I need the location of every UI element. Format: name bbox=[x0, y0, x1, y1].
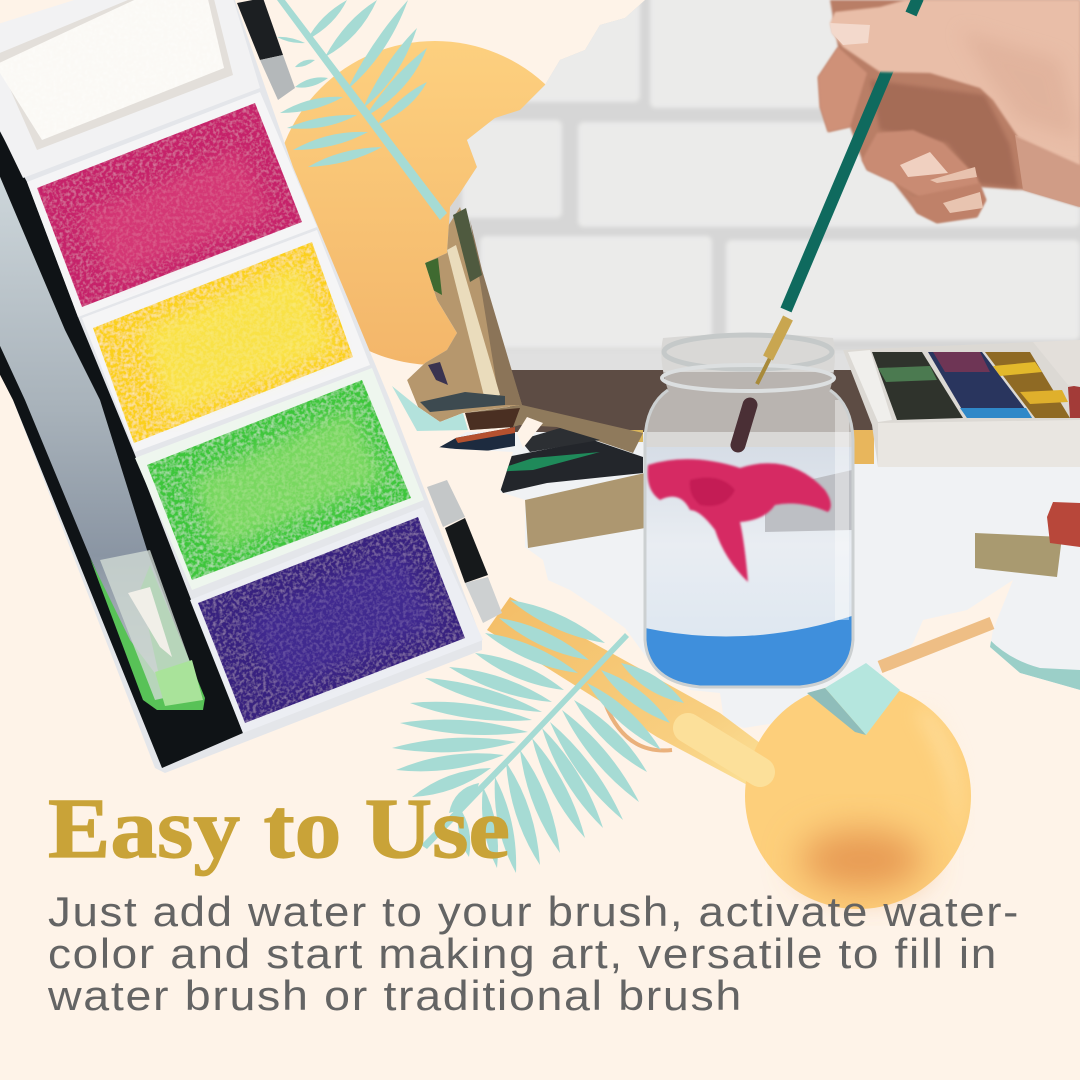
pan: yellow bbox=[82, 230, 370, 452]
hand silhouette bbox=[818, 0, 1080, 223]
case body bbox=[0, 0, 482, 773]
wrist bbox=[1015, 135, 1080, 207]
pan: magenta bbox=[27, 92, 317, 317]
watercolor box bbox=[843, 340, 1080, 467]
pink ink bbox=[648, 459, 831, 582]
bricks bbox=[440, 0, 1080, 375]
wall bbox=[400, 0, 1080, 375]
green reservoir bbox=[90, 558, 205, 710]
jar lip bbox=[664, 335, 832, 369]
icon: bottom palm leaf bbox=[392, 600, 684, 873]
hand bbox=[786, 0, 1080, 310]
palm shadow bbox=[870, 80, 1018, 188]
title: Easy to Use bbox=[48, 780, 510, 876]
ring finger bbox=[862, 130, 980, 197]
hand shading bbox=[960, 30, 1080, 140]
jar outline bbox=[645, 390, 853, 687]
body text: water brush or traditional brush bbox=[47, 972, 743, 1019]
teal patch bbox=[392, 386, 468, 431]
clip: top bbox=[237, 0, 283, 60]
water bbox=[646, 447, 852, 636]
body text bbox=[47, 888, 1020, 1019]
small paint pans bbox=[975, 533, 1062, 577]
wood block bbox=[525, 473, 645, 548]
clear brush tip bbox=[100, 550, 200, 700]
white nib bbox=[128, 587, 172, 657]
water brush barrel bbox=[0, 165, 203, 708]
palette lid and paint bbox=[438, 405, 643, 493]
tip green bbox=[155, 660, 203, 706]
glass above water bbox=[646, 336, 852, 447]
pan: purple bbox=[190, 507, 483, 733]
upper hand bbox=[830, 0, 1080, 165]
gold rod and thin arc bbox=[487, 597, 776, 788]
pan: green bbox=[135, 368, 424, 590]
middle finger bbox=[818, 47, 867, 132]
white table bbox=[450, 432, 1080, 732]
brush behind finger top bbox=[911, 0, 918, 14]
easel bbox=[407, 207, 522, 422]
grey reflection bbox=[765, 470, 852, 532]
teal corner piece bbox=[990, 640, 1080, 690]
decorative orange circle bbox=[273, 41, 597, 365]
torn gap in lid bbox=[517, 417, 543, 448]
pinky bbox=[895, 183, 986, 223]
brush ferrule and wet tip bbox=[738, 318, 788, 445]
pan: white bbox=[0, 0, 260, 178]
jar threads bbox=[662, 365, 834, 391]
teal cube bbox=[807, 663, 900, 735]
fingernails bbox=[830, 23, 983, 213]
clip: bottom bbox=[427, 480, 465, 527]
brush handle bbox=[786, 0, 918, 310]
body text: Just add water to your brush, activate water- bbox=[48, 888, 1020, 935]
dark tray bbox=[0, 122, 243, 768]
jar with ink bbox=[640, 330, 860, 692]
decorative sphere bbox=[745, 683, 971, 909]
paint palette case bbox=[0, 0, 502, 773]
thin gold rod bbox=[880, 623, 992, 667]
blue paint bbox=[645, 615, 855, 690]
gold rod front end bbox=[688, 728, 760, 772]
body text: color and start making art, versatile to fill in bbox=[48, 930, 998, 977]
photo: artist painting scene bbox=[400, 0, 1080, 732]
icon: top palm leaf bbox=[277, 0, 447, 220]
wooden table back bbox=[510, 370, 873, 432]
gold table gap bbox=[852, 430, 874, 464]
